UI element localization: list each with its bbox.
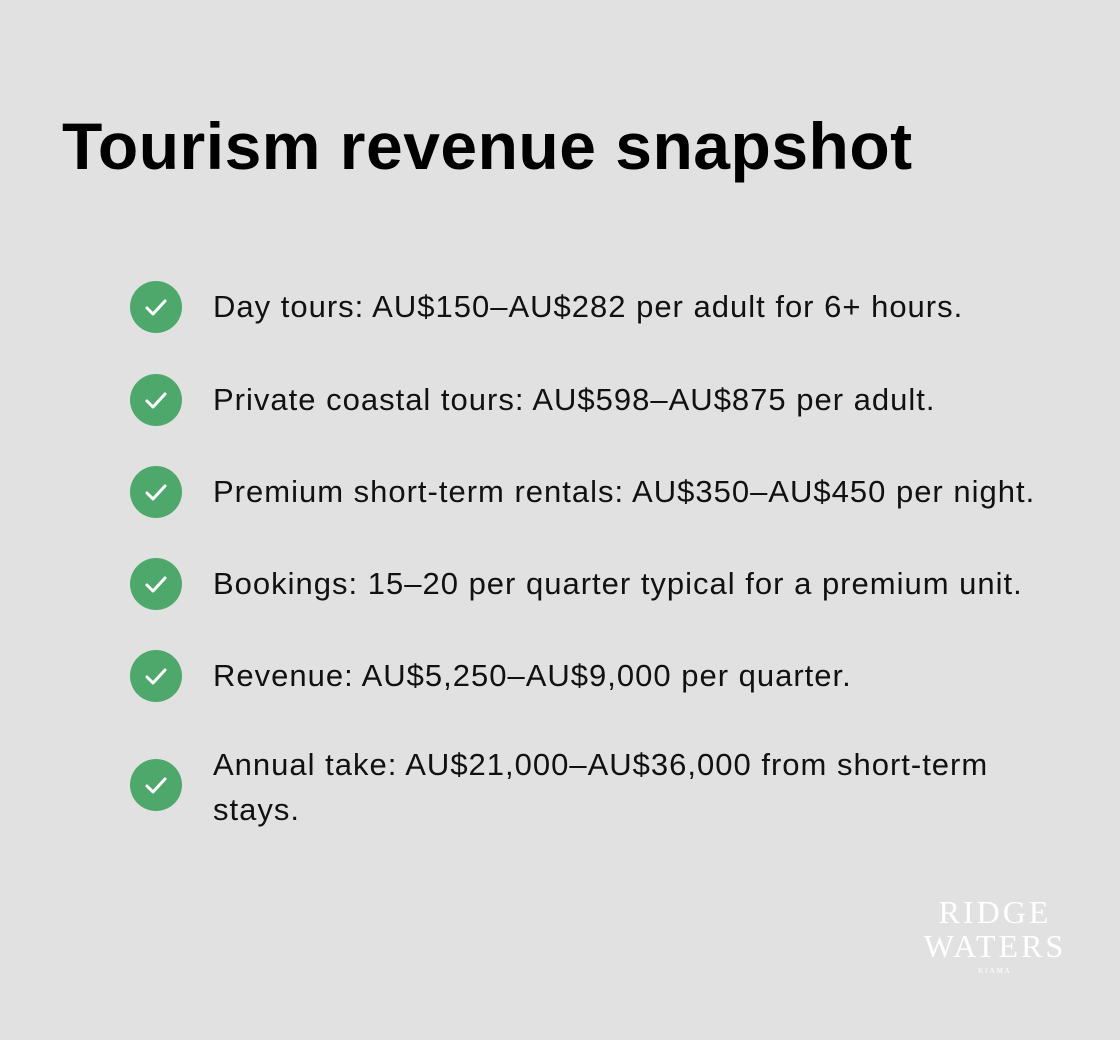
logo: KIAMA <box>978 967 1012 975</box>
logo: RIDGE <box>939 894 1051 930</box>
title: Tourism revenue snapshot <box>62 109 913 183</box>
item: day tours: Day tours: AU$150–AU$282 per adult for 6+ hours. <box>213 289 963 324</box>
item: annual take <box>130 747 988 827</box>
item: revenue: Revenue: AU$5,250–AU$9,000 per quarter. <box>213 658 852 693</box>
item: premium rentals: Premium short-term rentals: AU$350–AU$450 per night. <box>213 474 1035 509</box>
item: private coastal tours <box>130 374 936 426</box>
item: bookings <box>130 558 1023 610</box>
item: premium rentals <box>130 466 1035 518</box>
logo: WATERS <box>924 928 1066 964</box>
item: private coastal tours: Private coastal tours: AU$598–AU$875 per adult. <box>213 382 936 417</box>
item: annual take: Annual take: AU$21,000–AU$36,000 from short-term <box>213 747 988 782</box>
item: day tours <box>130 281 963 333</box>
item: bookings: Bookings: 15–20 per quarter typical for a premium unit. <box>213 566 1023 601</box>
item: annual take: stays. <box>213 792 300 827</box>
item: revenue <box>130 650 852 702</box>
logo <box>924 894 1066 975</box>
